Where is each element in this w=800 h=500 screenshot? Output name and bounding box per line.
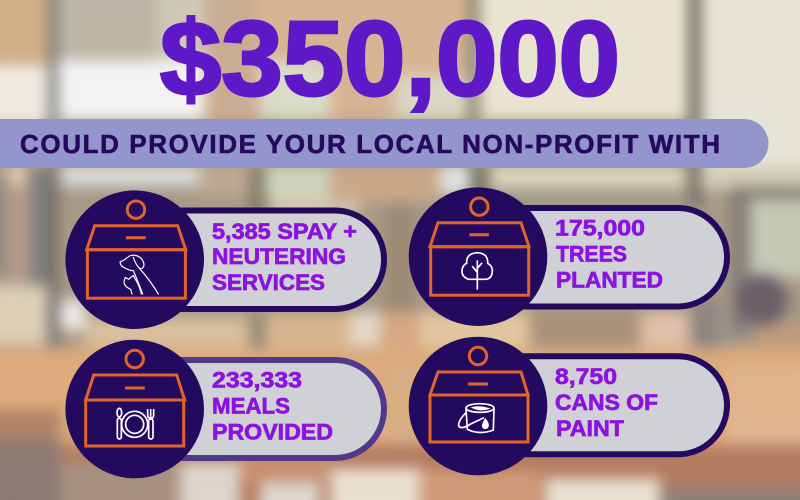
text: 8,750 cans of paint: PAINT (556, 416, 624, 441)
banner: could provide your local non-profit with: COULD PROVIDE YOUR LOCAL NON-PROFIT WITH (20, 129, 720, 159)
text: 233,333 meals provided (212, 368, 333, 444)
text: 233,333 meals provided: 233,333 (212, 368, 302, 393)
text: 8,750 cans of paint (555, 364, 658, 441)
text: 5,385 spay + neutering services: SERVICES (212, 270, 325, 295)
banner: could provide your local non-profit with (0, 119, 768, 168)
icon: donation box (430, 347, 528, 442)
text: 8,750 cans of paint: CANS OF (555, 390, 658, 415)
icon: donation box (86, 350, 185, 446)
panel: cans of paint (409, 337, 727, 475)
text: 233,333 meals provided: MEALS (212, 393, 290, 418)
text: 175,000 trees planted: TREES (556, 242, 627, 267)
text: 175,000 trees planted: 175,000 (555, 216, 645, 241)
icon: donation box (430, 198, 529, 295)
icon: paint can (459, 404, 494, 433)
text: 5,385 spay + neutering services: 5,385 SPAY + (212, 219, 357, 244)
icon: dog and cat (120, 255, 158, 294)
panel: spay and neutering services (65, 190, 384, 329)
text: 5,385 spay + neutering services (212, 219, 357, 295)
panel: meals provided (65, 340, 384, 478)
text: 233,333 meals provided: PROVIDED (212, 419, 333, 444)
text: 175,000 trees planted (555, 216, 663, 293)
icon: tree (462, 253, 492, 289)
icon: donation box (87, 201, 186, 298)
icon: plate and cutlery (117, 408, 154, 439)
text: 175,000 trees planted: PLANTED (556, 268, 663, 293)
text: 5,385 spay + neutering services: NEUTERING (212, 244, 346, 269)
text: 8,750 cans of paint: 8,750 (555, 364, 617, 389)
panel: trees planted (409, 187, 727, 326)
title: $350,000: $350,000 (160, 0, 620, 118)
